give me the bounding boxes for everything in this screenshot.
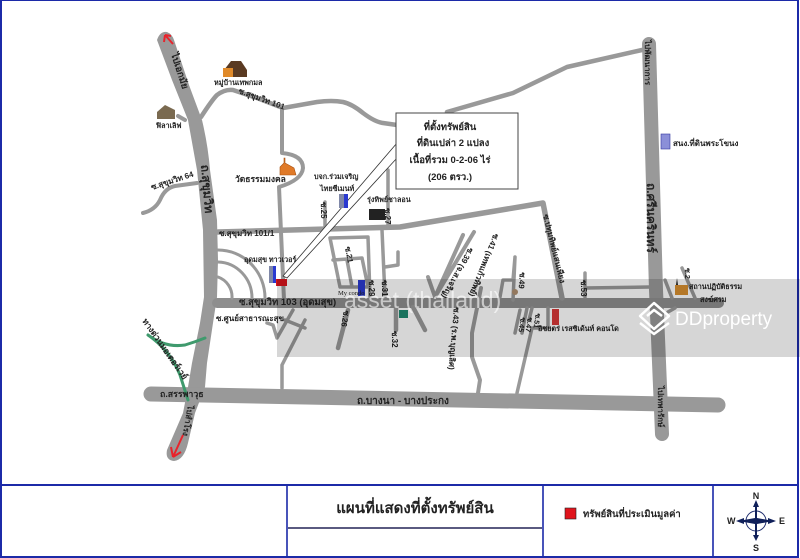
road labels: ซ.41 (เทพแก้วทิพย์): [467, 232, 501, 299]
road labels: ไปเอกมัย: [168, 50, 191, 90]
road labels: ซ.31: [380, 280, 389, 297]
road labels: [140, 39, 692, 437]
road labels: ซ.32: [390, 331, 399, 348]
watermark: DDproperty logo: [640, 303, 773, 334]
road network: [143, 32, 719, 461]
road labels: ซ.สุขุมวิท 103 (อุดมสุข): [239, 297, 336, 308]
road labels: ซ.สุขุมวิท 101/1: [219, 229, 275, 239]
title block: [1, 485, 798, 557]
icon: residence condo: [537, 309, 619, 333]
map title: แผนที่แสดงที่ตั้งทรัพย์สิน: [336, 496, 494, 517]
icon: company building: ไทยซีเมนท์: [319, 184, 355, 193]
icon: company building: บจก.ร่วมเจริญ: [314, 172, 358, 181]
road labels: ไปเทพารักษ์: [656, 385, 666, 428]
road labels: ถ.สรรพาวุธ: [160, 389, 204, 400]
legend: ทรัพย์สินที่ประเมินมูลค่า: [583, 506, 681, 521]
icon: My Condo: [338, 280, 365, 297]
road: Sukhumvit 103: [217, 298, 719, 308]
icon: Rung Thip school: รุ่งทิพย์ชาลอน: [367, 195, 411, 204]
road labels: ซ.39 (จ.ส.เจริญ): [439, 246, 475, 300]
watermark band: [277, 279, 800, 357]
road labels: ซ.21: [343, 246, 355, 264]
road labels: ซ.สุขุมวิท 101: [237, 86, 287, 113]
road labels: ซ.51: [531, 313, 543, 329]
side sois: [325, 170, 398, 297]
callout: property location: (206 ตรว.): [428, 172, 472, 183]
road: soi to temple: [279, 108, 303, 300]
road labels: ซ.49: [517, 272, 527, 290]
road labels: ถ.สุขุมวิท: [197, 164, 216, 214]
watermark: asset text: asset (thailand): [344, 287, 501, 313]
road labels: ซ.53: [579, 280, 588, 297]
icon: Thong Village house: [214, 61, 262, 88]
road labels: ซ.2: [683, 268, 692, 279]
direction arrow: to Ekkamai: [164, 35, 173, 44]
curved sois near Sukhumvit 103: [218, 250, 265, 298]
road labels: ซ.ปทุมทิพย์แสนเพียง: [540, 213, 568, 284]
road: Srinakarin: [649, 44, 662, 434]
road labels: ทางด่วนมอเตอร์เวย์: [140, 316, 190, 381]
icon: meditation centre: สงฆ์ศรม: [700, 295, 727, 304]
road labels: ซ.ศูนย์สาธารณะสุข: [216, 313, 284, 324]
road labels: ถ.บางนา - บางประกง: [357, 395, 449, 407]
legend: [565, 506, 681, 521]
road labels: ซ.25: [319, 202, 328, 219]
road: Sukhumvit highway: [157, 32, 218, 461]
icon: Villa: [155, 105, 181, 130]
icon: company building: [314, 172, 358, 208]
direction arrow: to Samrong: [171, 435, 183, 457]
callout: property location: ที่ดินเปล่า 2 แปลง: [417, 135, 490, 149]
icon: temple: วัดธรรมมงคล: [235, 174, 286, 184]
road labels: ซ.45: [516, 317, 528, 333]
road labels: ซ.29: [367, 280, 376, 297]
road: Sukhumvit 64: [143, 116, 197, 213]
icon: building, Sano: สนง.ที่ดินพระโขนง: [673, 137, 739, 148]
road: Sukhumvit 101/1: [218, 203, 562, 298]
icon: building, Sano: [661, 134, 739, 149]
road labels: ซ.43 (ร.พ.บุญเลิศ): [446, 307, 461, 370]
icon: My Condo: My condo: [338, 290, 365, 297]
road labels: ซ.47: [523, 317, 535, 333]
callout leader: [283, 143, 397, 278]
compass rose: E: [779, 516, 785, 526]
icon: temple: [235, 158, 296, 184]
watermark: DDproperty logo: DDproperty: [675, 309, 773, 330]
subject property marker: [276, 279, 287, 286]
icon: Udomsuk Tower: [244, 255, 296, 283]
compass rose: S: [753, 543, 759, 553]
road labels: ซ.26: [339, 310, 351, 328]
icon: Udomsuk Tower: อุดมสุข ทาวเวอร์: [244, 255, 296, 264]
callout: property location: [396, 113, 518, 189]
callout: property location: เนื้อที่รวม 0-2-06 ไร่: [409, 152, 491, 166]
road: Bang Na - Bang Prakong: [151, 394, 718, 405]
icon: Villa: ฟิลาเลิฟ: [155, 121, 181, 130]
icon: Rung Thip school: [367, 195, 411, 220]
icon: small landmark: [512, 289, 518, 295]
icon: meditation centre: [675, 278, 742, 304]
road: Sukhumvit 101: [201, 90, 397, 125]
icon: residence condo: อิชยตร่ เรสซิเด้นท์ คอนโด: [537, 324, 619, 333]
green route: motorway: [148, 335, 205, 400]
road labels: ถ.ศรีนครินทร์: [644, 183, 658, 253]
road labels: ไปพัฒนาการ: [643, 39, 653, 86]
icon: meditation centre: สถานปฏิบัติธรรม: [689, 282, 742, 291]
compass rose: W: [727, 516, 736, 526]
compass rose: N: [753, 491, 759, 501]
icon: Thong Village house: หมู่บ้านเทพกมล: [214, 78, 262, 88]
road labels: ไปสำโรง: [181, 404, 196, 437]
callout: property location: ที่ตั้งทรัพย์สิน: [424, 119, 477, 133]
icon: green building: [399, 310, 408, 318]
compass rose: [727, 491, 785, 553]
road labels: ซ.สุขุมวิท 64: [150, 170, 195, 193]
road labels: ซ.27: [383, 208, 392, 225]
